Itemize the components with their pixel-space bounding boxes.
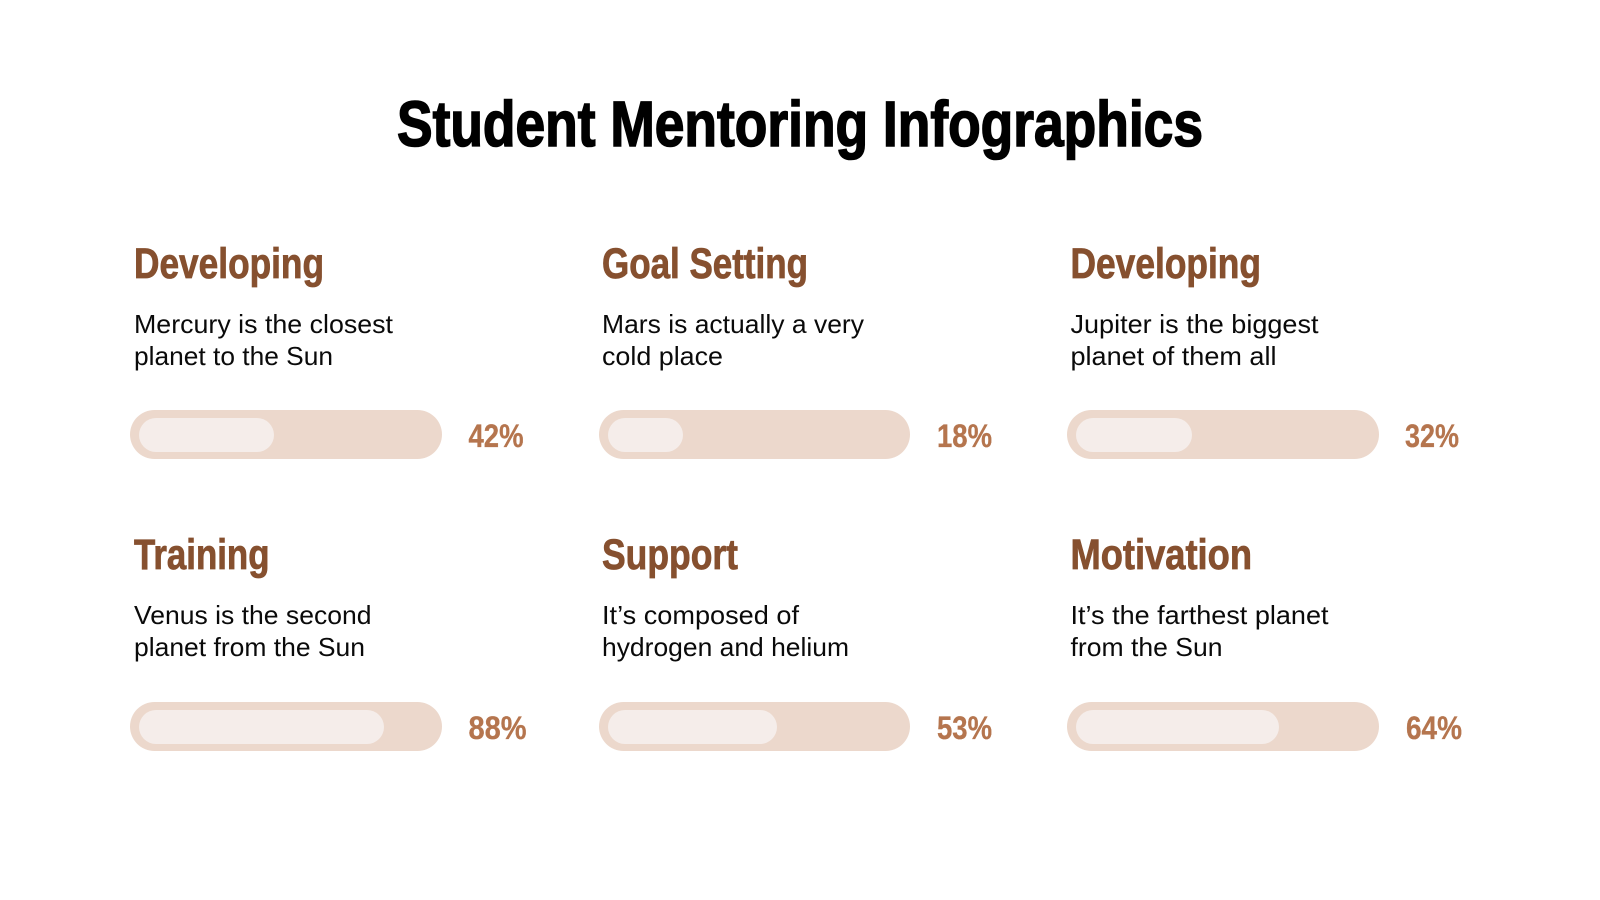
heading: Training bbox=[134, 531, 270, 579]
panel: Developing (Jupiter) bbox=[1067, 240, 1459, 459]
description: Jupiter is the biggest bbox=[1070, 309, 1319, 339]
value: 53% bbox=[937, 710, 992, 746]
description bbox=[602, 600, 849, 662]
title: Student Mentoring Infographics bbox=[397, 88, 1203, 160]
description: planet from the Sun bbox=[134, 632, 365, 662]
value: 88% bbox=[468, 710, 526, 746]
description: from the Sun bbox=[1070, 632, 1222, 662]
heading: Developing bbox=[134, 240, 324, 288]
description bbox=[134, 600, 372, 662]
heading: Motivation bbox=[1070, 531, 1252, 579]
description: planet of them all bbox=[1070, 341, 1276, 371]
description: cold place bbox=[602, 341, 723, 371]
panel: Developing (Mercury) bbox=[130, 240, 524, 459]
description: It’s composed of bbox=[602, 600, 800, 630]
panel: Goal Setting bbox=[599, 240, 992, 459]
progress bar 53% bbox=[599, 702, 910, 751]
description: Venus is the second bbox=[134, 600, 372, 630]
value: 42% bbox=[468, 418, 524, 454]
description: Mercury is the closest bbox=[134, 309, 394, 339]
heading: Support bbox=[602, 531, 738, 579]
progress bar 32% bbox=[1067, 410, 1379, 459]
description bbox=[134, 309, 394, 371]
description bbox=[1070, 309, 1319, 371]
progress bar 88% bbox=[130, 702, 442, 751]
value: 32% bbox=[1405, 418, 1459, 454]
heading: Developing bbox=[1070, 240, 1261, 288]
panel: Motivation bbox=[1067, 531, 1462, 751]
description: It’s the farthest planet bbox=[1070, 600, 1329, 630]
description: Mars is actually a very bbox=[602, 309, 864, 339]
description: planet to the Sun bbox=[134, 341, 333, 371]
description: hydrogen and helium bbox=[602, 632, 849, 662]
panel: Support bbox=[599, 531, 992, 751]
heading: Goal Setting bbox=[602, 240, 808, 288]
progress bar 18% bbox=[599, 410, 910, 459]
value: 18% bbox=[937, 418, 992, 454]
description bbox=[1070, 600, 1329, 662]
panel: Training bbox=[130, 531, 526, 751]
progress bar 64% bbox=[1067, 702, 1379, 751]
value: 64% bbox=[1406, 710, 1462, 746]
progress bar 42% bbox=[130, 410, 442, 459]
description bbox=[602, 309, 864, 371]
